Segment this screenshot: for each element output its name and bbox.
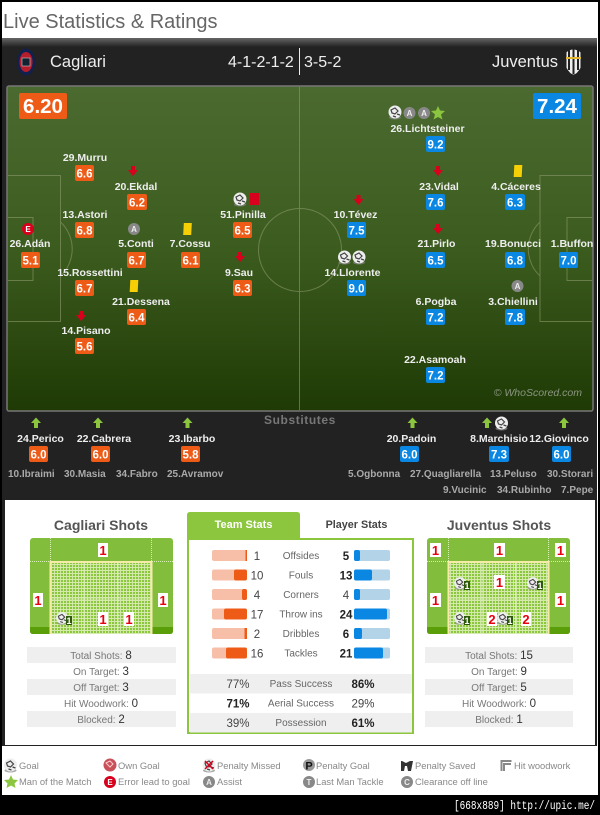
stat: Fouls: Fouls xyxy=(289,570,313,582)
player: Chiellini xyxy=(488,280,538,325)
player: Pinilla xyxy=(220,192,266,238)
player: Asamoah: 22.Asamoah xyxy=(404,354,466,366)
player: Conti: 5.Conti xyxy=(118,238,154,250)
stat: Offsides: 5 xyxy=(343,551,350,563)
player: Asamoah: 7.2 xyxy=(428,370,444,382)
stat: Throw ins: 24 xyxy=(340,610,353,622)
sub: Ibarbo: 23.Ibarbo xyxy=(169,433,215,445)
goal map: Cagliari xyxy=(30,538,173,634)
player: Pogba xyxy=(416,296,457,325)
heading: Juventus Shots: Juventus Shots xyxy=(447,517,551,533)
stat: Possession: Possession xyxy=(275,718,327,729)
player: Cáceres: 6.3 xyxy=(507,198,523,210)
icon: Juventus crest xyxy=(566,49,581,75)
player: Murru: 6.6 xyxy=(76,168,92,180)
player: Astori: 13.Astori xyxy=(63,209,108,221)
player: Adán: E xyxy=(25,225,31,234)
panel: team stats xyxy=(188,539,413,733)
player: Vidal: 7.6 xyxy=(428,198,444,210)
unused subs: Juventus: 30.Storari xyxy=(547,469,593,480)
player: Ekdal: 6.2 xyxy=(129,198,145,210)
player: Asamoah xyxy=(404,354,466,383)
sub: Padoin xyxy=(387,418,436,462)
player: Adán: 26.Adán xyxy=(10,238,50,250)
sub: Cabrera xyxy=(77,418,131,462)
stat: Pass Success: 77% xyxy=(226,679,250,691)
player: Dessena: 6.4 xyxy=(128,312,145,324)
stat: Fouls: 10 xyxy=(251,570,263,582)
watermark: © WhoScored.com xyxy=(494,387,582,399)
sub: Ibarbo: 5.8 xyxy=(182,450,199,462)
player: Llorente: 14.Llorente xyxy=(324,267,381,279)
goal map: Juventus: 1 xyxy=(496,543,503,558)
stat: Aerial Success: Aerial Success xyxy=(268,698,334,710)
player: Dessena xyxy=(112,280,170,325)
player: Pirlo xyxy=(418,224,455,268)
player: Sau xyxy=(225,252,253,296)
player: Conti: 6.7 xyxy=(128,256,144,268)
player: Pirlo: 6.5 xyxy=(428,256,444,268)
goal map: Juventus: 2 xyxy=(488,612,496,627)
player: Rossettini xyxy=(57,267,123,296)
player: Astori xyxy=(63,209,108,238)
player: Pogba: 7.2 xyxy=(428,312,444,324)
pitch xyxy=(7,86,593,411)
goal map: Juventus: 2 xyxy=(522,612,530,627)
player: Buffon xyxy=(551,238,593,268)
player: Buffon: 1.Buffon xyxy=(551,238,593,250)
formation divider xyxy=(299,48,300,75)
heading: Cagliari Shots: Cagliari Shots xyxy=(54,517,148,533)
legend: Penalty Goal: P xyxy=(305,760,313,772)
unused subs: Juventus: 13.Peluso xyxy=(490,469,537,480)
sub: Perico: 6.0 xyxy=(30,450,46,462)
player: Ekdal: 20.Ekdal xyxy=(115,181,157,193)
stat: Corners: Corners xyxy=(283,590,319,601)
legend xyxy=(4,758,571,788)
stat: Dribbles xyxy=(254,629,349,641)
player: Llorente: 9.0 xyxy=(348,284,364,296)
player: Dessena: 21.Dessena xyxy=(112,296,170,308)
player: Murru xyxy=(63,152,107,181)
legend: Own Goal: Own Goal xyxy=(118,760,160,771)
shot stats: Juventus: Blocked: 1 xyxy=(475,714,523,726)
legend: Penalty Saved: Penalty Saved xyxy=(415,760,475,771)
panel: stats xyxy=(5,500,595,745)
player: Tévez xyxy=(334,195,377,238)
unused subs: Cagliari: 34.Fabro xyxy=(116,469,158,480)
player: Pinilla: 51.Pinilla xyxy=(220,209,266,221)
player: Cáceres: 4.Cáceres xyxy=(491,181,541,193)
legend: Penalty Missed: Penalty Missed xyxy=(217,760,281,771)
stat: Aerial Success: 71% xyxy=(226,698,250,710)
stat: Dribbles: 2 xyxy=(254,629,260,641)
sub: Giovinco: 12.Giovinco xyxy=(529,433,589,445)
stat: Throw ins xyxy=(251,610,353,622)
player: Cossu: 7.Cossu xyxy=(170,238,210,250)
sub: Giovinco xyxy=(529,418,589,462)
stat: Tackles: Tackles xyxy=(284,648,318,660)
goal map: Cagliari: 1 xyxy=(99,612,107,627)
sub: Marchisio xyxy=(470,416,528,462)
unused subs: Juventus: 7.Pepe xyxy=(561,485,594,496)
stat: Pass Success xyxy=(190,674,412,694)
player: Ekdal xyxy=(115,166,157,210)
legend: Error lead to goal: E xyxy=(107,778,113,787)
shot stats: Cagliari: Blocked: 2 xyxy=(77,714,125,726)
sub: Padoin: 6.0 xyxy=(402,450,418,462)
stat: Corners xyxy=(254,590,350,602)
stat: Throw ins: 17 xyxy=(251,610,263,622)
goal map: Cagliari: 1 xyxy=(99,543,107,558)
goal map: Juventus: 1 xyxy=(496,575,503,590)
stat: Possession: 61% xyxy=(351,718,375,730)
sub: Perico: 24.Perico xyxy=(17,433,64,445)
player: Bonucci xyxy=(485,238,541,268)
shot stats: Cagliari: Total Shots: 8 xyxy=(70,650,132,662)
icon: Cagliari crest xyxy=(17,48,35,76)
stat: Tackles: 21 xyxy=(340,648,353,660)
unused subs: Cagliari xyxy=(8,469,224,480)
player: Rossettini: 6.7 xyxy=(76,284,92,296)
legend: Assist xyxy=(203,776,242,788)
stat: Corners: 4 xyxy=(343,590,350,602)
legend: Clearance off line: Clearance off line xyxy=(415,776,488,787)
unused subs: Cagliari: 25.Avramov xyxy=(167,469,224,480)
stat: Corners: 4 xyxy=(254,590,261,602)
legend: Clearance off line: C xyxy=(404,778,410,787)
formation: Juventus: 3-5-2 xyxy=(304,54,341,71)
goal map: Juventus xyxy=(427,538,570,634)
tab: Team Stats: Team Stats xyxy=(215,519,272,531)
shot stats: Cagliari: Hit Woodwork: 0 xyxy=(64,698,138,710)
shot stats: Juventus: On Target: 9 xyxy=(471,666,527,678)
legend: Man of the Match: Man of the Match xyxy=(19,776,91,787)
player: Tévez: 10.Tévez xyxy=(334,209,377,221)
unused subs: Cagliari: 30.Masia xyxy=(64,469,106,480)
team name: Cagliari: Cagliari xyxy=(50,53,106,71)
player: Murru: 29.Murru xyxy=(63,152,107,164)
player: Pirlo: 21.Pirlo xyxy=(418,238,455,250)
player: Chiellini: 7.8 xyxy=(507,312,524,324)
player: Cossu xyxy=(170,223,210,268)
stat: Dribbles: 6 xyxy=(343,629,349,641)
player: Cáceres xyxy=(491,165,541,210)
player: Pogba: 6.Pogba xyxy=(416,296,457,308)
sub: Cabrera: 22.Cabrera xyxy=(77,433,131,445)
team name: Juventus: Juventus xyxy=(492,53,558,71)
sub: Cabrera: 6.0 xyxy=(92,450,108,462)
player: Chiellini: 3.Chiellini xyxy=(488,296,538,308)
legend: Penalty Goal: Penalty Goal xyxy=(316,760,370,771)
stat: Aerial Success xyxy=(226,698,375,710)
legend: Assist: Assist xyxy=(217,776,242,787)
stat: Offsides: 1 xyxy=(254,551,260,563)
stat bars xyxy=(212,550,390,658)
player: Tévez: 7.5 xyxy=(348,226,365,238)
legend: Last Man Tackle: Last Man Tackle xyxy=(316,776,384,787)
player: Lichtsteiner xyxy=(388,106,465,152)
stat: Pass Success: 86% xyxy=(351,679,375,691)
player: Sau: 6.3 xyxy=(234,284,250,296)
stat: Fouls: 13 xyxy=(340,570,352,582)
goal map: Juventus: 1 xyxy=(432,593,439,608)
player: Lichtsteiner: 9.2 xyxy=(428,140,444,152)
player: Bonucci: 6.8 xyxy=(507,256,524,268)
legend: Goal xyxy=(4,758,39,772)
goal map: Cagliari: 1 xyxy=(159,593,167,608)
stat: Possession: 39% xyxy=(226,718,250,730)
goal map: Cagliari: 1 xyxy=(125,612,133,627)
goal map: Juventus: 1 xyxy=(432,543,439,558)
legend: Goal: Goal xyxy=(19,760,39,771)
sub: Giovinco: 6.0 xyxy=(554,450,570,462)
unused subs: Juventus: 34.Rubinho xyxy=(497,485,551,496)
team rating: Juventus: 7.24 xyxy=(537,95,578,118)
goal map: Juventus: 1 xyxy=(557,543,564,558)
sub: Marchisio: 7.3 xyxy=(491,450,507,462)
shot stats: Juventus: Hit Woodwork: 0 xyxy=(462,698,536,710)
player: Conti xyxy=(118,223,154,268)
legend: Own Goal xyxy=(104,758,160,772)
sub: Marchisio: 8.Marchisio xyxy=(470,433,528,445)
stat: Throw ins: Throw ins xyxy=(279,610,323,620)
stat: Offsides: Offsides xyxy=(283,551,319,562)
player: Buffon: 7.0 xyxy=(560,256,576,268)
legend: Last Man Tackle: T xyxy=(307,778,312,787)
shot stats: Juventus: Total Shots: 15 xyxy=(465,650,533,662)
shot stats: Cagliari xyxy=(27,647,176,727)
legend: Error lead to goal: Error lead to goal xyxy=(118,776,190,787)
stat: Dribbles: Dribbles xyxy=(283,629,319,640)
legend: Penalty Missed xyxy=(202,758,281,772)
stat: Offsides xyxy=(254,551,350,563)
player: Pinilla: 6.5 xyxy=(234,226,251,238)
sub: Perico xyxy=(17,418,64,462)
tab: Team Stats xyxy=(187,512,300,539)
stat: Possession xyxy=(190,713,412,732)
formation: Cagliari: 4-1-2-1-2 xyxy=(228,54,294,71)
player: Llorente xyxy=(324,250,381,296)
player: Bonucci: 19.Bonucci xyxy=(485,238,541,250)
player: Pisano: 5.6 xyxy=(76,342,92,354)
unused subs: Juventus: 27.Quagliarella xyxy=(410,469,482,480)
player: Vidal: 23.Vidal xyxy=(419,181,459,193)
sub: Padoin: 20.Padoin xyxy=(387,433,436,445)
unused subs: Cagliari: 10.Ibraimi xyxy=(8,469,55,480)
sub: Ibarbo xyxy=(169,418,215,462)
shot stats: Juventus xyxy=(425,647,573,727)
player: Vidal xyxy=(419,166,459,210)
stat: Pass Success: Pass Success xyxy=(270,679,332,690)
shot stats: Cagliari: On Target: 3 xyxy=(73,666,129,678)
shot stats: Juventus: Off Target: 5 xyxy=(471,682,527,694)
player: Astori: 6.8 xyxy=(76,226,93,238)
player: Pisano: 14.Pisano xyxy=(61,325,111,337)
stat: Tackles xyxy=(251,648,353,660)
legend: Penalty Goal xyxy=(303,759,370,772)
team rating: Cagliari: 6.20 xyxy=(23,95,63,118)
tab: Player Stats: Player Stats xyxy=(326,519,387,531)
player: Lichtsteiner: 26.Lichtsteiner xyxy=(390,123,465,135)
player: Cossu: 6.1 xyxy=(182,256,199,268)
goal map: Juventus: 1 xyxy=(557,593,564,608)
shot stats: Cagliari: Off Target: 3 xyxy=(73,682,129,694)
unused subs: Juventus xyxy=(348,469,594,496)
player: Pisano xyxy=(61,311,111,354)
player: Adán: 5.1 xyxy=(22,256,39,268)
player: Adán xyxy=(10,223,50,268)
heading: substitutes: Substitutes xyxy=(264,413,336,427)
stat: Fouls xyxy=(251,570,352,582)
stat: Tackles: 16 xyxy=(251,648,263,660)
goal map: Cagliari: 1 xyxy=(34,593,42,608)
player: Rossettini: 15.Rossettini xyxy=(57,267,123,279)
title: Live Statistics & Ratings xyxy=(3,11,218,33)
unused subs: Juventus: 5.Ogbonna xyxy=(348,469,401,480)
legend: Hit woodwork: Hit woodwork xyxy=(514,760,571,771)
unused subs: Juventus: 9.Vucinic xyxy=(443,485,487,496)
player: Sau: 9.Sau xyxy=(225,267,253,279)
stat: Aerial Success: 29% xyxy=(351,698,375,710)
